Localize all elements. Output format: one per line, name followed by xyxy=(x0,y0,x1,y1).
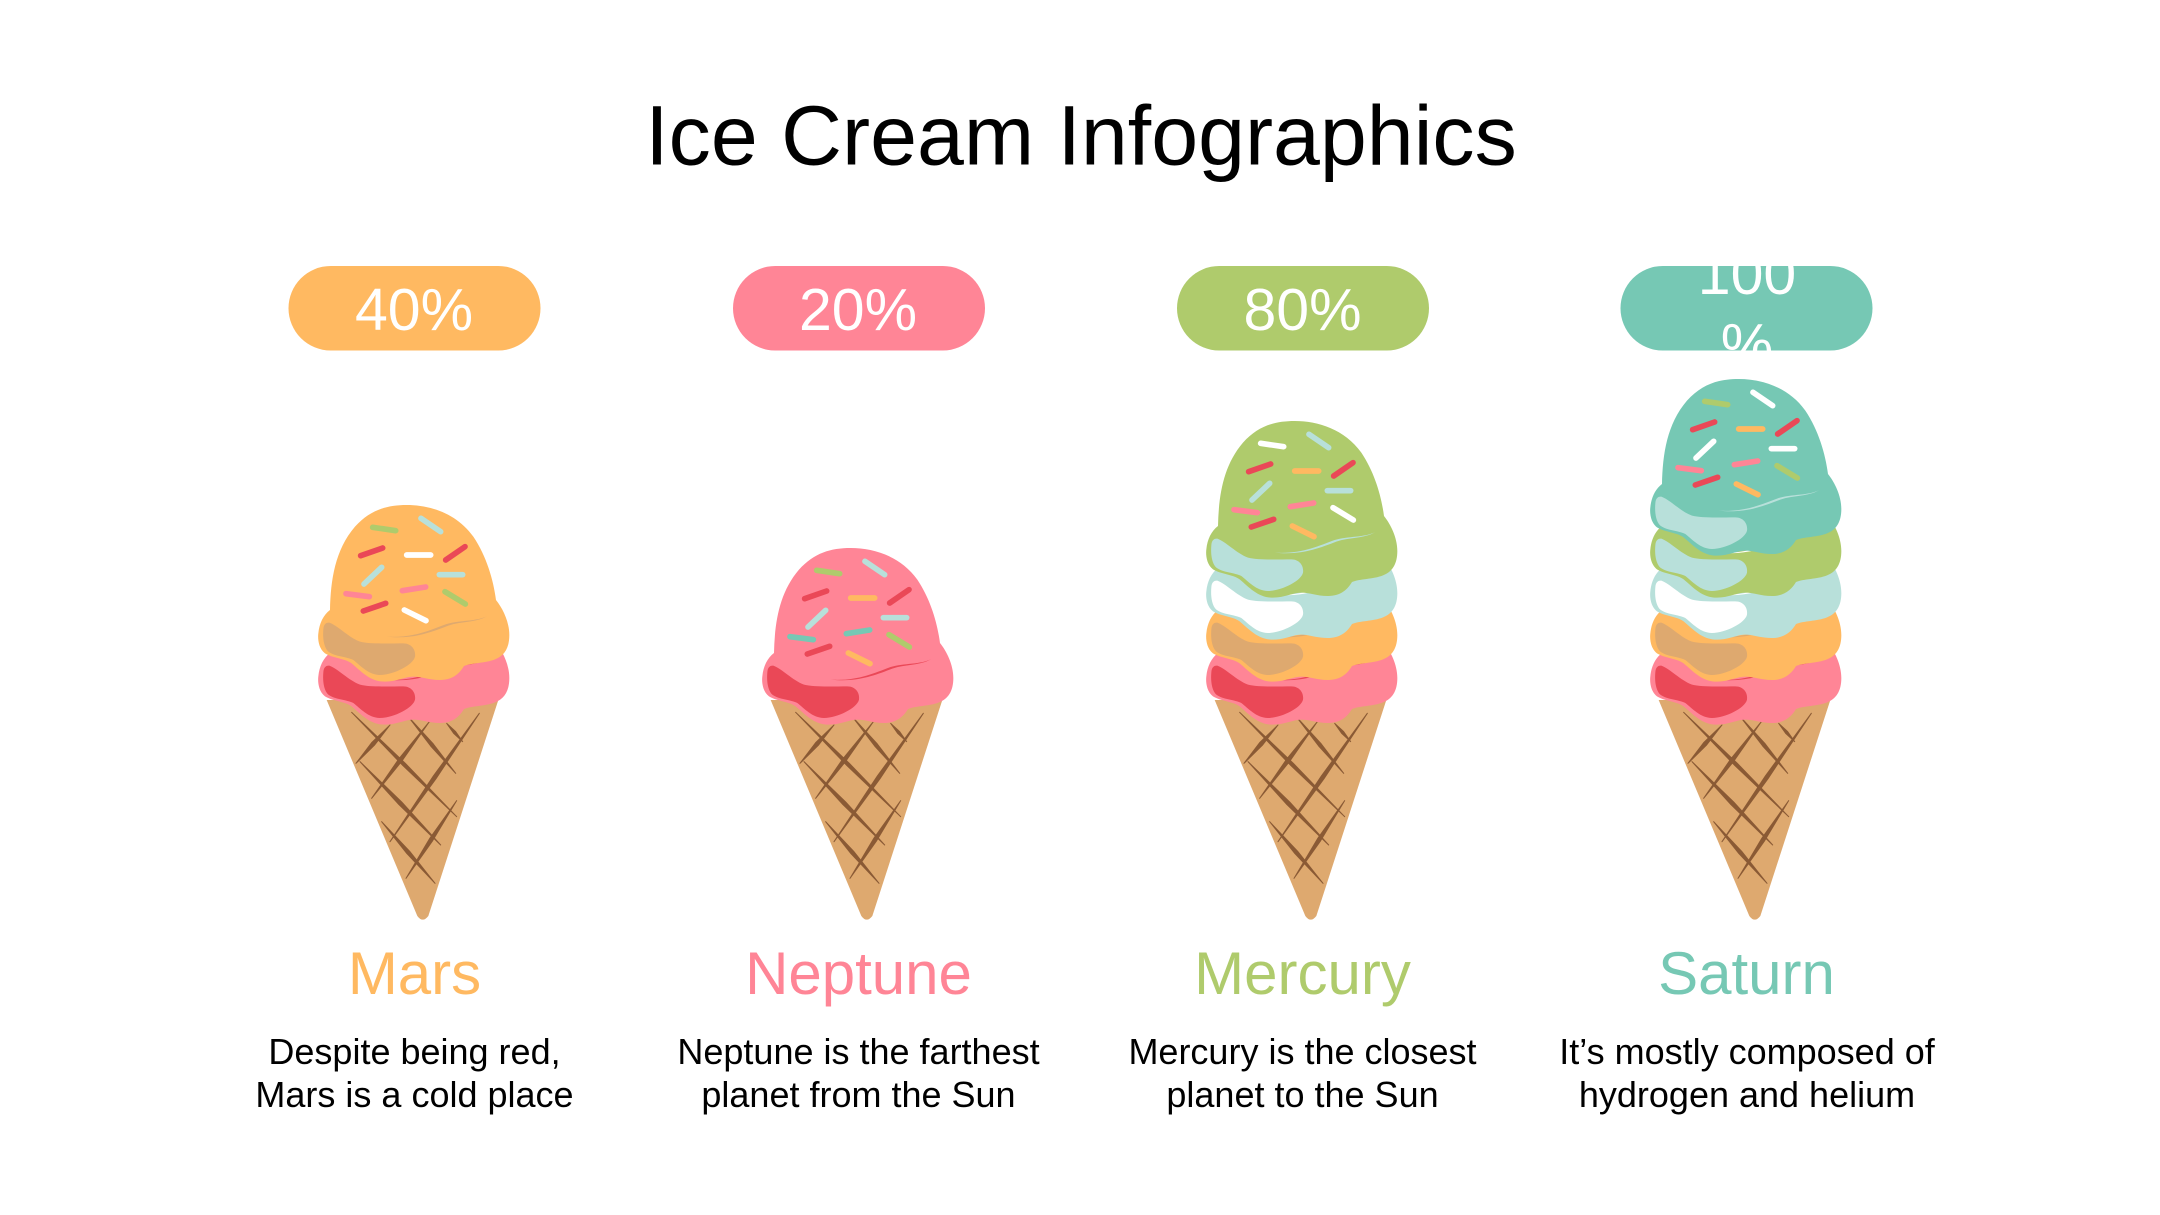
text block: Mercury description: planet to the Sun xyxy=(1166,1074,1439,1115)
panel: Mars xyxy=(255,266,574,1115)
heading: Neptune: Neptune xyxy=(745,940,972,1007)
percentage pill: Saturn 100%: 100 xyxy=(1698,241,1796,307)
text block: Neptune description: Neptune is the farthest xyxy=(677,1031,1040,1072)
percentage pill: Mercury 80%: 80% xyxy=(1243,277,1362,343)
icon: Mercury ice cream, four scoops xyxy=(1206,421,1397,920)
text block: Mars description: Despite being red, xyxy=(268,1031,561,1072)
percentage pill: Neptune 20% xyxy=(733,266,985,350)
icon: Neptune ice cream, one scoop xyxy=(762,548,953,920)
text block: Mercury description: Mercury is the closest xyxy=(1128,1031,1477,1072)
icon: Mars ice cream, two scoops xyxy=(318,505,509,920)
percentage pill: Mars 40%: 40% xyxy=(355,277,473,343)
heading: Mercury: Mercury xyxy=(1194,940,1411,1007)
heading: Mars: Mars xyxy=(348,940,481,1007)
percentage pill: Neptune 20%: 20% xyxy=(799,277,917,343)
percentage pill: Saturn 100% xyxy=(1620,266,1872,350)
percentage pill: Mars 40% xyxy=(288,266,540,350)
text block: Neptune description: planet from the Sun xyxy=(701,1074,1016,1115)
percentage pill: Mercury 80% xyxy=(1177,266,1429,350)
panel: Mercury xyxy=(1128,266,1477,1115)
heading: Saturn: Saturn xyxy=(1658,940,1835,1007)
text block: Mars description: Mars is a cold place xyxy=(255,1074,574,1115)
percentage pill: Saturn 100%: % xyxy=(1721,312,1773,378)
text block: Saturn description: hydrogen and helium xyxy=(1579,1074,1915,1115)
title: Ice Cream Infographics xyxy=(645,89,1517,183)
panel: Saturn xyxy=(1559,241,1936,1115)
icon: Saturn ice cream, five scoops xyxy=(1650,379,1841,920)
text block: Saturn description: It’s mostly composed of xyxy=(1559,1031,1936,1072)
panel: Neptune xyxy=(677,266,1040,1115)
